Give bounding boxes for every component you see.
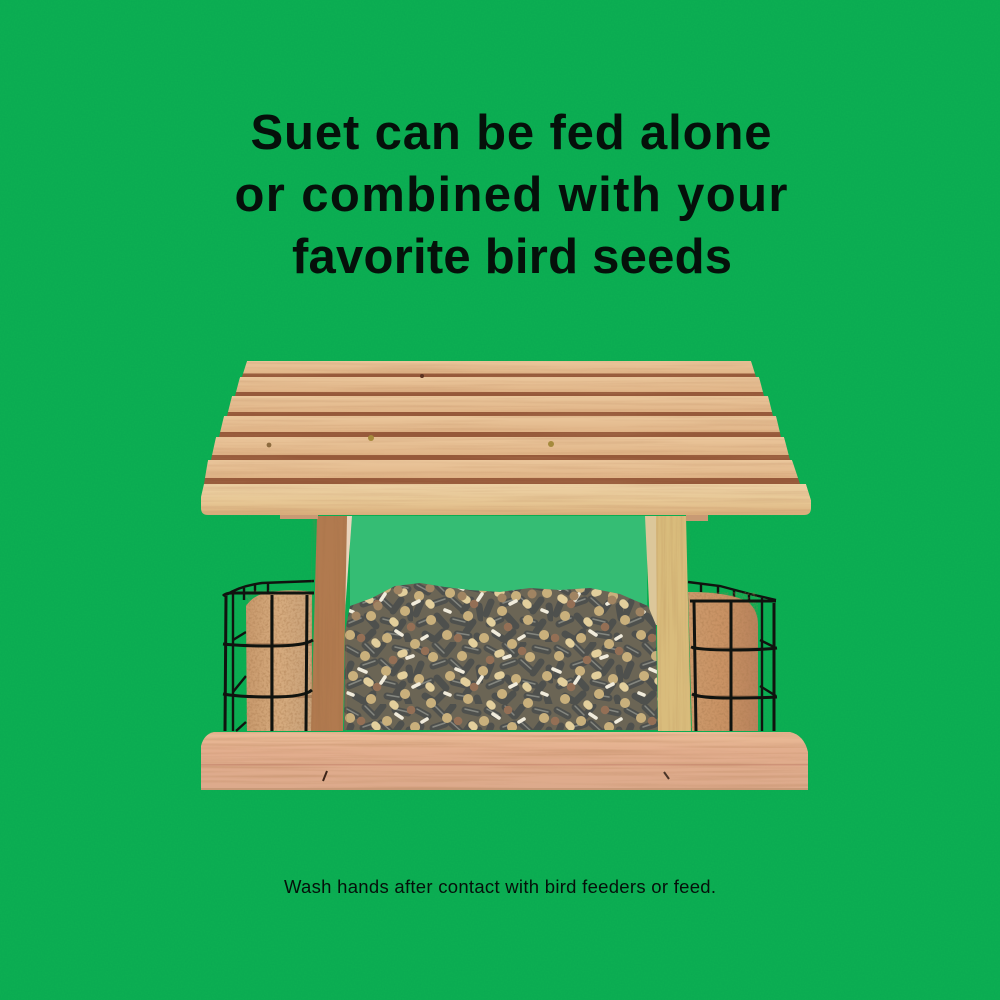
seed mix (340, 580, 662, 732)
right suet cage front wires (690, 601, 777, 731)
left post (311, 516, 352, 731)
right post pale side (645, 516, 657, 625)
loose seeds along top of the pile (356, 588, 640, 616)
right suet cage back wires (688, 582, 776, 731)
left suet cake (246, 590, 312, 731)
roof planks (242, 361, 756, 374)
base tray (200, 731, 810, 791)
feeder window glass (350, 516, 647, 616)
roof grooves (204, 374, 800, 484)
left suet cage back wires (226, 581, 314, 731)
right post (656, 516, 691, 731)
left suet cage front wires (223, 593, 314, 731)
title: or combined with your (234, 168, 788, 222)
title: Suet can be fed alone (250, 106, 772, 160)
footer note: Wash hands after contact with bird feeders or feed. (284, 876, 716, 897)
knots (368, 435, 374, 441)
title (234, 106, 788, 284)
wood grain (200, 360, 812, 516)
roof support tabs (280, 515, 708, 521)
right suet cake (688, 592, 758, 731)
title: favorite bird seeds (292, 230, 732, 284)
illustration: bird feeder (200, 360, 812, 791)
roof (200, 360, 812, 516)
